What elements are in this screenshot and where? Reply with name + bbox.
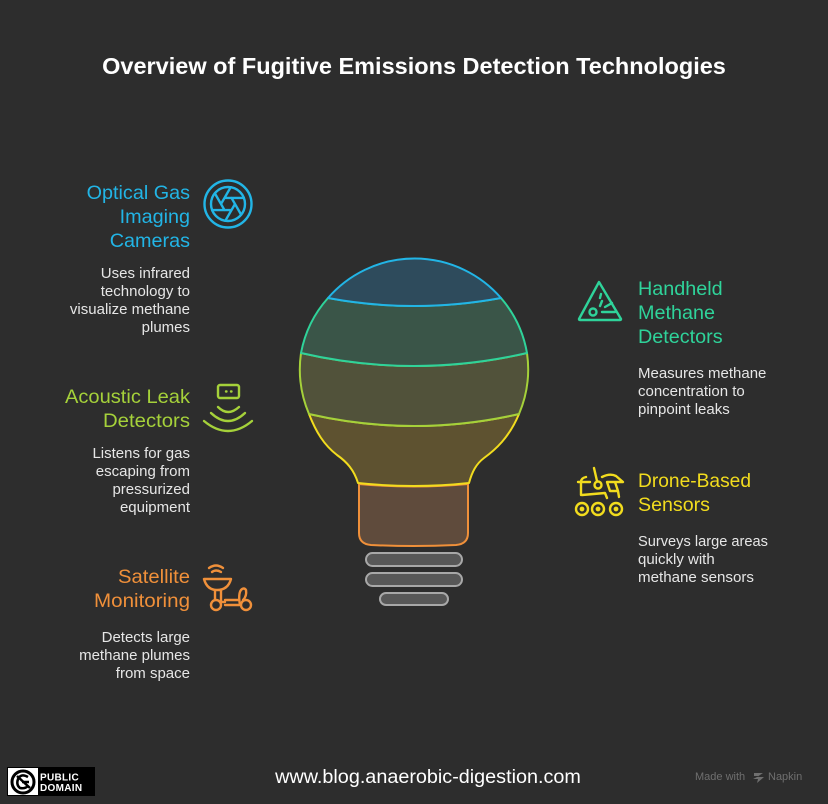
icon: warning triangle [579, 282, 621, 320]
footer: public domain badge [7, 767, 95, 796]
footer: made with napkin [695, 771, 802, 783]
footer: website url: www.blog.anaerobic-digestion.com [274, 766, 581, 788]
item: Handheld Methane Detectors [579, 278, 766, 418]
footer: public domain badge: DOMAIN [40, 783, 82, 794]
description: pinpoint leaks [638, 401, 730, 418]
icon: drone rover [576, 468, 623, 515]
bulb segment: lime [300, 353, 528, 426]
bulb segment: yellow [309, 414, 519, 486]
heading: Monitoring [94, 590, 190, 612]
description: methane plumes [79, 647, 190, 664]
heading: Detectors [638, 326, 723, 348]
item: Satellite Monitoring [79, 566, 251, 682]
description: equipment [120, 499, 191, 516]
description: escaping from [96, 463, 190, 480]
bulb segment: blue top [328, 259, 501, 306]
footer: public domain badge: PUBLIC [40, 772, 79, 784]
description: Surveys large areas [638, 533, 768, 550]
description: Detects large [102, 629, 190, 646]
heading: Imaging [120, 206, 190, 228]
title: Overview of Fugitive Emissions Detection Technologies [102, 53, 726, 79]
description: technology to [101, 283, 190, 300]
heading: Sensors [638, 494, 710, 516]
item: Acoustic Leak Detectors [65, 385, 252, 516]
icon: satellite dish and rover [204, 566, 251, 610]
heading: Cameras [110, 230, 190, 252]
description: Listens for gas [92, 445, 190, 462]
icon: acoustic sensor [204, 385, 252, 431]
heading: Acoustic Leak [65, 386, 190, 408]
description: visualize methane [70, 301, 190, 318]
heading: Handheld [638, 278, 723, 300]
bulb base thread 2 [366, 573, 462, 586]
heading: Satellite [118, 566, 190, 588]
description: concentration to [638, 383, 745, 400]
icon: camera aperture [204, 180, 252, 228]
heading: Optical Gas [87, 182, 190, 204]
bulb segment: orange neck [359, 484, 468, 546]
footer: made with napkin: Napkin [768, 771, 802, 783]
description: quickly with [638, 551, 715, 568]
item: Drone-Based Sensors [576, 468, 768, 586]
footer: made with napkin: Made with [695, 771, 745, 783]
description: Uses infrared [101, 265, 190, 282]
description: pressurized [112, 481, 190, 498]
description: plumes [142, 319, 190, 336]
heading: Drone-Based [638, 470, 751, 492]
bulb base thread 1 [366, 553, 462, 566]
item: Optical Gas Imaging Cameras [70, 180, 252, 336]
description: from space [116, 665, 190, 682]
heading: Detectors [103, 410, 190, 432]
description: methane sensors [638, 569, 754, 586]
heading: Methane [638, 302, 715, 324]
lightbulb diagram [300, 259, 528, 605]
bulb segment: green [301, 298, 527, 366]
bulb base thread 3 [380, 593, 448, 605]
description: Measures methane [638, 365, 766, 382]
